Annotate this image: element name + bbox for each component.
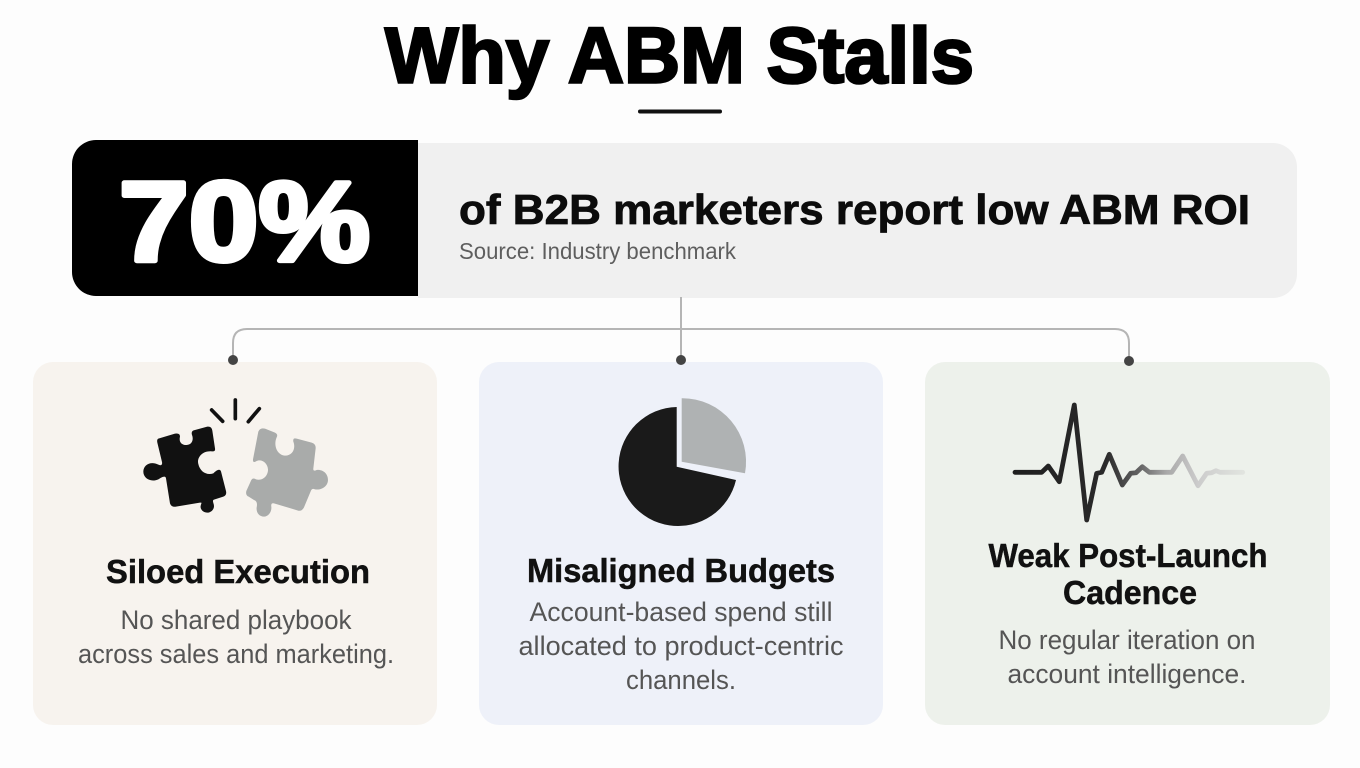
card heading: Weak Post-Launch	[988, 537, 1268, 574]
connector lines	[228, 297, 1134, 366]
title: Why ABM Stalls	[385, 10, 974, 100]
card body: Account-based spend still	[530, 597, 832, 627]
card heading	[988, 537, 1268, 611]
card body: allocated to product-centric	[518, 631, 844, 661]
banner background	[418, 143, 1297, 298]
card heading: Misaligned Budgets	[527, 552, 835, 589]
stat description: of B2B marketers report low ABM ROI	[459, 186, 1250, 233]
stat value: 70%	[119, 158, 370, 284]
panel: misaligned budgets	[479, 362, 883, 725]
card heading: Cadence	[1063, 574, 1197, 611]
card body: across sales and marketing.	[78, 639, 394, 669]
card body: account intelligence.	[1008, 659, 1246, 689]
card heading: Siloed Execution	[106, 553, 370, 590]
title underline	[638, 110, 722, 114]
card body	[518, 597, 844, 695]
icon: fading heartbeat line	[1015, 405, 1243, 520]
panel: siloed execution	[33, 362, 437, 725]
icon: pie chart	[619, 398, 746, 526]
card body: channels.	[626, 665, 736, 695]
stat block	[72, 140, 418, 296]
stat source: Source: Industry benchmark	[459, 238, 736, 264]
icon: separated puzzle pieces	[143, 400, 328, 517]
card body: No regular iteration on	[998, 625, 1256, 655]
card body	[998, 625, 1256, 689]
panel: weak post-launch cadence	[925, 362, 1330, 725]
card body	[78, 605, 394, 669]
stat banner	[72, 140, 1297, 298]
card body: No shared playbook	[120, 605, 352, 635]
